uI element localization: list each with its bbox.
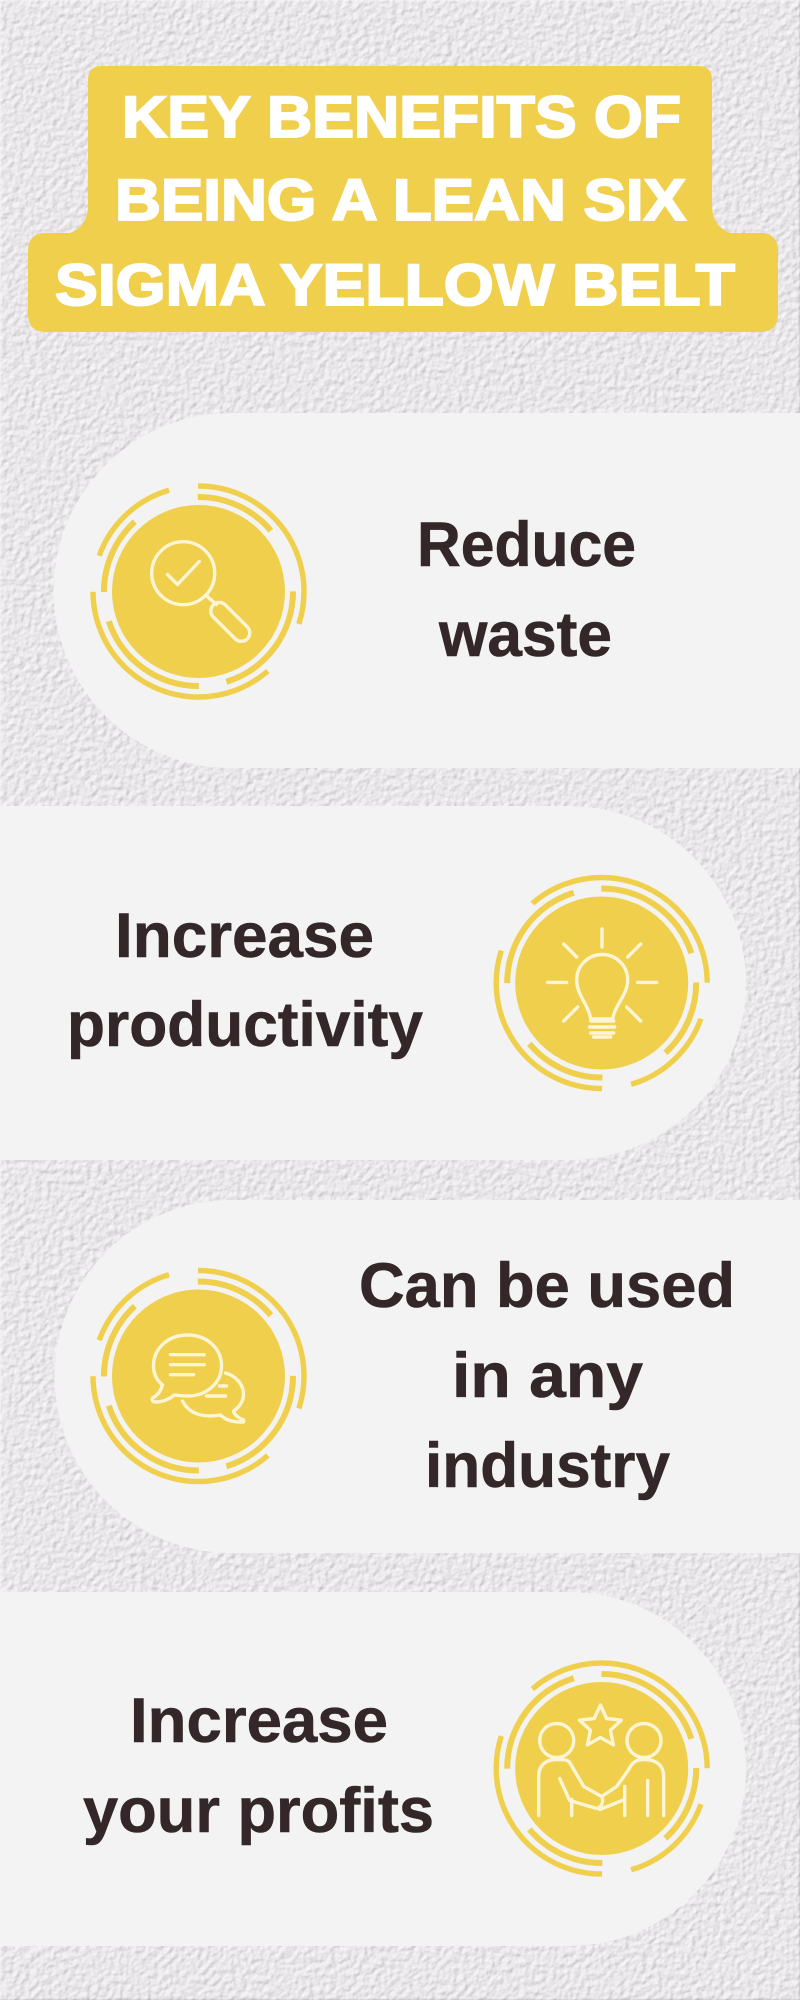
title badge shape (28, 66, 778, 332)
label: can be used in any industry (359, 1251, 735, 1501)
label: increase your profits: your profits (83, 1776, 434, 1846)
icon: handshake with star (496, 1663, 707, 1874)
label: can be used in any industry: Can be used (359, 1251, 735, 1321)
panel: can be used in any industry (55, 1200, 800, 1553)
label: can be used in any industry: industry (425, 1431, 670, 1501)
icon: magnifying glass with check mark (93, 486, 304, 697)
title text: KEY BENEFITS OF (122, 85, 681, 150)
label: reduce waste (417, 510, 636, 670)
icon: light bulb (496, 878, 707, 1088)
title text: BEING A LEAN SIX (115, 168, 686, 233)
pill background (55, 1200, 800, 1553)
title badge (28, 66, 778, 332)
icon: speech bubbles (93, 1270, 304, 1482)
pill background (54, 413, 800, 768)
title text (55, 85, 735, 318)
panel: increase productivity (0, 806, 746, 1160)
pill background (0, 806, 746, 1160)
label: reduce waste: waste (438, 600, 612, 670)
label: increase your profits: Increase (130, 1686, 388, 1756)
panel: reduce waste (54, 413, 800, 768)
panel: increase your profits (0, 1592, 746, 1946)
pill background (0, 1592, 746, 1946)
label: reduce waste: Reduce (417, 510, 636, 580)
label: increase productivity: productivity (67, 990, 423, 1060)
label: increase productivity (67, 901, 423, 1060)
title text: SIGMA YELLOW BELT (55, 253, 735, 318)
label: can be used in any industry: in any (452, 1341, 643, 1411)
label: increase productivity: Increase (115, 901, 374, 971)
label: increase your profits (83, 1686, 434, 1846)
